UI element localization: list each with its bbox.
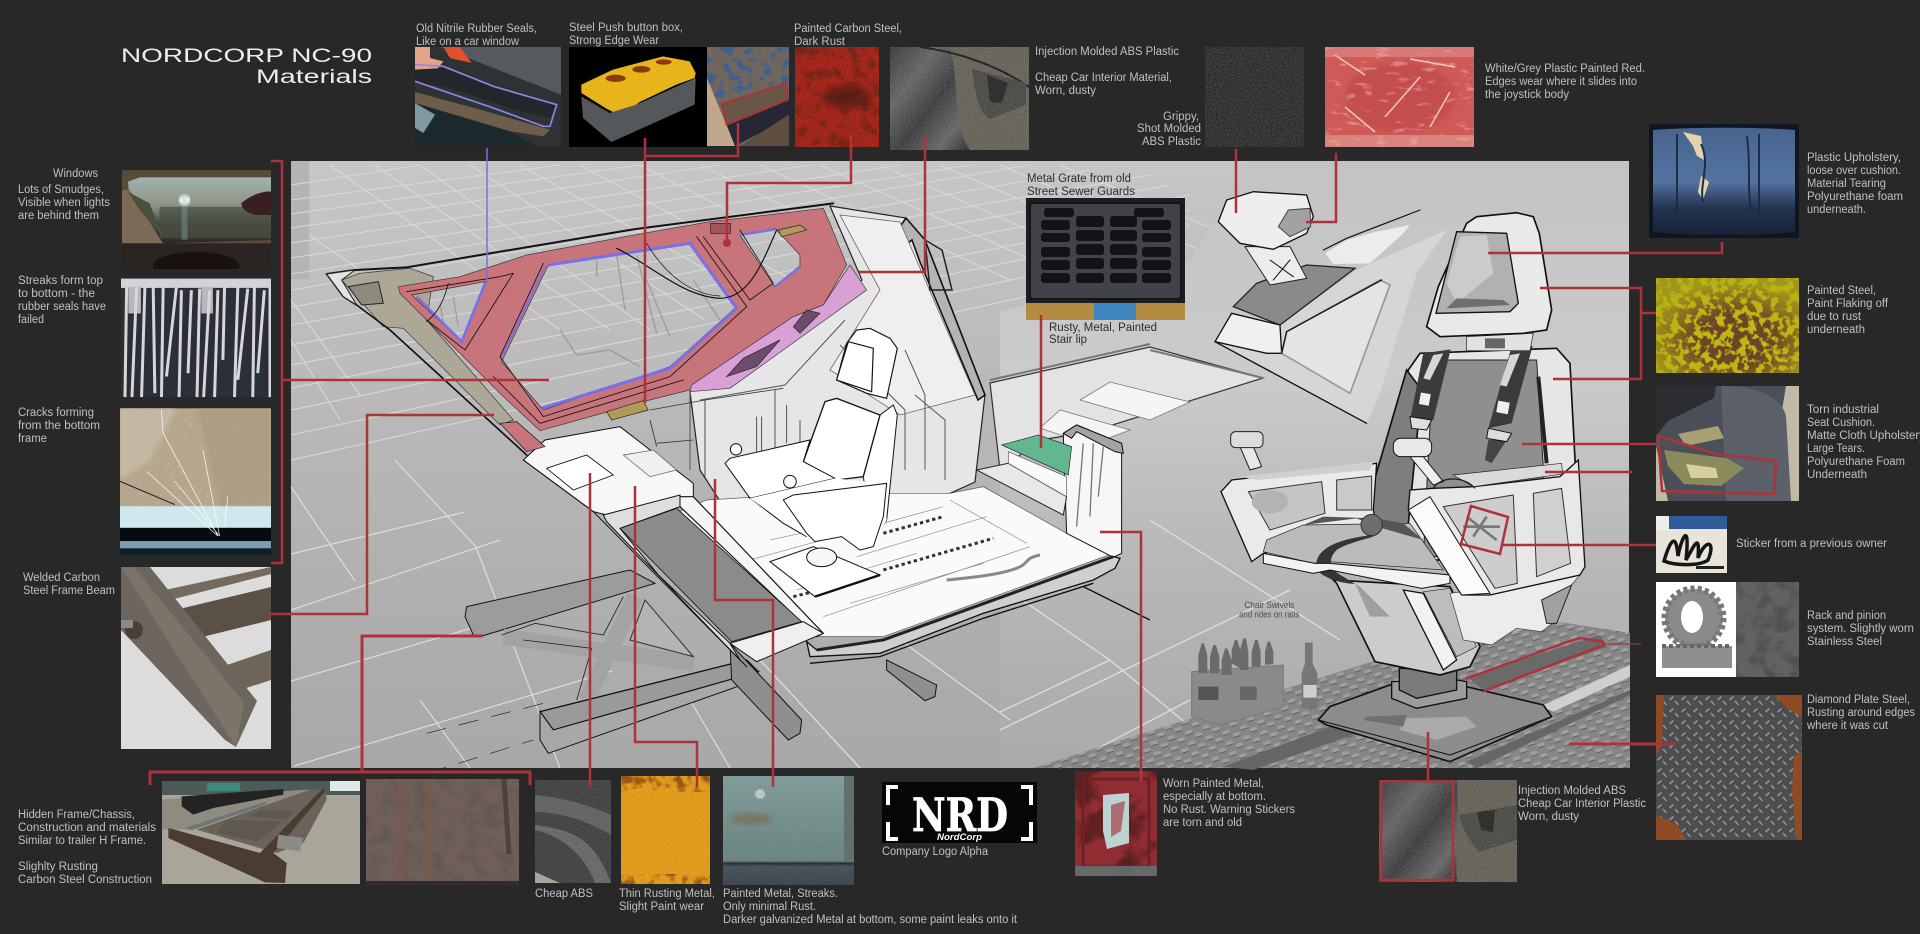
caption: chassis: Hidden Frame/Chassis, <box>18 809 135 821</box>
image: thin rusting metal <box>621 776 710 884</box>
caption: diamond plate: Diamond Plate Steel, <box>1807 694 1910 706</box>
image: red painted plastic <box>1325 47 1474 147</box>
painted steel leader <box>1540 288 1656 379</box>
caption: windows: Windows <box>53 168 98 180</box>
caption: grippy plastic: Grippy, <box>1163 111 1199 123</box>
left handle <box>1240 447 1262 470</box>
caption: metal grate: Stair lip <box>1049 334 1087 346</box>
cheap ABS leader <box>589 473 591 787</box>
base plate <box>770 547 880 597</box>
caption: injection molded detail: Worn, dusty <box>1518 811 1579 823</box>
diamond plate floor <box>1033 622 1630 768</box>
sticker on arm <box>1463 517 1500 540</box>
caption: ABS plastic: Injection Molded ABS Plastic <box>1035 46 1179 58</box>
image: rack and pinion <box>1656 582 1799 677</box>
caption: rack and pinion: system. Slightly worn <box>1807 623 1914 635</box>
caption: upholstery <box>1807 152 1903 216</box>
cab wall details <box>650 388 787 477</box>
caption: worn painted metal: Worn Painted Metal, <box>1163 778 1264 790</box>
caption: injection molded detail: Cheap Car Interior Plastic <box>1518 798 1646 810</box>
bottles <box>1192 638 1317 725</box>
caption: painted metal: Painted Metal, Streaks. <box>723 888 838 900</box>
caption: painted steel: Paint Flaking off <box>1807 298 1889 310</box>
caption: cracks: from the bottom <box>18 420 100 432</box>
caption: cheap ABS: Cheap ABS <box>535 888 593 900</box>
front cross beam <box>540 660 758 730</box>
caption: torn cushion: Torn industrial <box>1807 404 1879 416</box>
floor <box>643 487 1113 637</box>
front windshield frame <box>327 203 867 455</box>
caption: worn painted metal: especially at bottom. <box>1163 791 1266 803</box>
caption: rubber seals: Like on a car window <box>416 36 520 48</box>
torn cushion leaders <box>1522 444 1656 472</box>
image: glass cracks <box>120 408 271 555</box>
caption: frame beam: Welded Carbon <box>23 572 100 584</box>
neck <box>1467 333 1533 351</box>
caption: injection molded detail: Injection Molded ABS <box>1518 785 1626 797</box>
logo <box>882 782 1037 843</box>
ABS leader <box>859 135 925 272</box>
caption: streaks: Streaks form top <box>18 275 103 287</box>
right arm panel <box>1408 460 1585 595</box>
caption: chair swivels: Chair Swivels <box>1244 600 1295 610</box>
button box leader <box>645 123 738 403</box>
sticker leader <box>1461 506 1656 554</box>
caption: upholstery: underneath. <box>1807 204 1866 216</box>
left arm panel <box>1221 463 1377 562</box>
gate <box>1233 265 1355 325</box>
rack leader <box>1465 638 1604 691</box>
caption: torn cushion: Large Tears. <box>1807 443 1865 455</box>
ramp panel <box>677 497 823 637</box>
caption: torn cushion: Polyurethane Foam <box>1807 456 1905 468</box>
caption: push button box <box>569 22 683 47</box>
image: welded frame beam <box>121 567 271 749</box>
tan frame strip <box>342 268 513 425</box>
title <box>121 46 372 88</box>
title: Materials <box>256 66 372 88</box>
caption: thin rusting metal <box>619 888 715 913</box>
caption: upholstery: Polyurethane foam <box>1807 191 1903 203</box>
stair platform <box>990 347 1263 470</box>
seat <box>863 405 897 543</box>
beam leader <box>268 415 494 614</box>
X brace <box>503 597 693 700</box>
caption: thin rusting metal: Slight Paint wear <box>619 901 704 913</box>
caption: painted metal <box>723 888 1018 926</box>
caption: dark rust: Dark Rust <box>794 36 846 48</box>
front seat strip <box>1263 553 1450 588</box>
caption: windows <box>18 168 110 222</box>
chassis bracket <box>150 636 530 785</box>
belts <box>1410 349 1451 420</box>
caption: chair swivels: and rides on rails <box>1239 609 1300 619</box>
seat back frame <box>1367 348 1581 567</box>
rack thin leader <box>1604 643 1641 645</box>
seat cushion <box>1263 523 1443 570</box>
housing <box>1215 230 1447 423</box>
caption: worn painted metal <box>1163 778 1295 829</box>
image: push button box <box>569 47 707 147</box>
joystick sketch <box>1215 192 1447 423</box>
painted metal leader <box>715 479 773 787</box>
caption: rack and pinion: Stainless Steel <box>1807 636 1882 648</box>
logo: NRD <box>912 788 1008 842</box>
caption: logo: Company Logo Alpha <box>882 846 989 858</box>
image: windshield smudges <box>122 170 271 269</box>
black frame lines <box>407 230 773 423</box>
caption: streaks: rubber seals have <box>18 301 106 313</box>
caption: metal grate: Metal Grate from old <box>1027 173 1131 185</box>
caption: painted metal: Darker galvanized Metal at bottom, some paint leaks onto it <box>723 914 1018 926</box>
caption: grippy plastic <box>1137 111 1201 148</box>
image: injection molded detail <box>1379 780 1517 882</box>
caption: push button box: Strong Edge Wear <box>569 35 659 47</box>
image: worn painted metal <box>1075 771 1157 876</box>
base leader <box>1427 732 1429 781</box>
caption: torn cushion: Underneath <box>1807 469 1867 481</box>
caption: upholstery: loose over cushion. <box>1807 165 1901 177</box>
caption: dark rust <box>794 23 902 48</box>
caption: chassis: Slighlty Rusting <box>18 861 98 873</box>
caption: windows: Visible when lights <box>18 197 110 209</box>
caption: chassis <box>18 809 156 886</box>
caption: ABS plastic: Worn, dusty <box>1035 85 1096 97</box>
panel: sketch background <box>291 161 1630 768</box>
stalk <box>1245 247 1307 285</box>
caption: diamond plate: where it was cut <box>1806 720 1889 732</box>
column <box>1333 580 1480 675</box>
caption: chassis: Carbon Steel Construction <box>18 874 152 886</box>
caption: painted steel: underneath <box>1807 324 1865 336</box>
caption: streaks <box>18 275 106 326</box>
caption: dark rust: Painted Carbon Steel, <box>794 23 902 35</box>
pink panel <box>690 265 867 392</box>
red plastic leader <box>1306 153 1336 222</box>
front edge <box>807 557 1120 657</box>
caption: cracks <box>18 407 100 445</box>
chair render <box>1223 575 1630 770</box>
rails <box>1223 727 1357 770</box>
diamond leader <box>1569 742 1675 746</box>
caption: cracks: frame <box>18 433 47 445</box>
long beam <box>730 643 802 740</box>
cables <box>617 230 777 298</box>
image: rubber seals <box>415 47 561 146</box>
caption: sticker: Sticker from a previous owner <box>1736 538 1887 550</box>
caption: chassis: Similar to trailer H Frame. <box>18 835 146 847</box>
wall and floor behind chair <box>1000 161 1629 768</box>
red leader lines <box>150 123 1722 787</box>
image: grippy plastic <box>1205 47 1304 147</box>
cab floor and seat <box>643 328 1150 663</box>
back wall and roof <box>690 206 985 540</box>
caption: ABS plastic: Cheap Car Interior Material, <box>1035 72 1172 84</box>
caption: windows: are behind them <box>18 210 99 222</box>
caption: worn painted metal: are torn and old <box>1163 817 1242 829</box>
yellow latches <box>607 401 648 420</box>
stair lip leader <box>1040 315 1042 448</box>
lower box <box>1450 575 1580 645</box>
windows bracket <box>271 161 549 563</box>
caption: chassis: Construction and materials <box>18 822 156 834</box>
right cushion <box>1453 463 1563 487</box>
image: paint streaks <box>121 278 271 398</box>
front console and ramp <box>523 427 823 667</box>
blue seal outlines <box>542 243 737 408</box>
caption: upholstery: Material Tearing <box>1807 178 1886 190</box>
base <box>1318 685 1552 762</box>
caption: grippy plastic: ABS Plastic <box>1142 136 1201 148</box>
side wall <box>1063 425 1122 557</box>
caption: painted metal: Only minimal Rust. <box>723 901 816 913</box>
caption: grippy plastic: Shot Molded <box>1137 123 1201 135</box>
caption: rubber seals <box>416 23 537 48</box>
blue seal leader <box>486 148 488 283</box>
caption: metal grate <box>1027 173 1157 346</box>
caption: thin rusting metal: Thin Rusting Metal, <box>619 888 715 900</box>
caption: streaks: failed <box>18 314 44 326</box>
caption: red plastic: the joystick body <box>1485 89 1569 101</box>
dark rust leader <box>727 136 851 243</box>
caption: streaks: to bottom - the <box>18 288 95 300</box>
chassis sketch under the vehicle <box>427 570 937 773</box>
image: torn blue upholstery <box>1649 124 1799 238</box>
stairs steps <box>977 463 1067 515</box>
caption: rack and pinion <box>1807 610 1914 648</box>
caption: torn cushion <box>1807 404 1920 481</box>
vehicle interior <box>690 206 1263 540</box>
armrest <box>1325 225 1410 264</box>
caption: painted steel: Painted Steel, <box>1807 285 1876 297</box>
joystick head <box>1218 192 1313 249</box>
image: sewer grate and stair lip <box>1026 198 1185 320</box>
caption: frame beam <box>23 572 115 597</box>
worn metal leader <box>1100 532 1141 781</box>
caption: rack and pinion: Rack and pinion <box>1807 610 1886 622</box>
red frame with window openings <box>398 208 847 431</box>
rear cross beam <box>465 570 655 637</box>
caption: chair swivels <box>1239 600 1300 619</box>
grippy leader <box>1235 149 1237 213</box>
cushion leader <box>1488 242 1722 253</box>
title: NORDCORP NC-90 <box>121 46 372 67</box>
caption: red plastic: White/Grey Plastic Painted Red. <box>1485 63 1645 75</box>
image: cheap ABS <box>535 780 611 883</box>
logo: NordCorp <box>937 832 983 842</box>
image: diamond plate <box>1656 695 1802 840</box>
caption: torn cushion: Seat Cushion. <box>1807 417 1875 429</box>
image: sticker <box>1656 516 1727 573</box>
caption: frame beam: Steel Frame Beam <box>23 585 115 597</box>
caption: diamond plate <box>1806 694 1915 732</box>
image: dark rust <box>795 47 879 147</box>
caption: worn painted metal: No Rust. Warning Stickers <box>1163 804 1295 816</box>
caption: red plastic: Edges wear where it slides into <box>1485 76 1637 88</box>
image: worn blue steel <box>707 47 789 146</box>
caption: painted steel: due to rust <box>1807 311 1862 323</box>
caption: metal grate: Rusty, Metal, Painted <box>1049 322 1157 334</box>
thin rust leader <box>635 486 697 787</box>
caption: push button box: Steel Push button box, <box>569 22 683 34</box>
red dot marker <box>723 239 731 247</box>
image: streaked painted metal <box>723 776 854 885</box>
image: torn seat cushion <box>1656 386 1799 501</box>
caption: metal grate: Street Sewer Guards <box>1027 186 1135 198</box>
image: trailer frame <box>162 781 360 884</box>
image: flaking yellow paint <box>1656 278 1799 373</box>
caption: rubber seals: Old Nitrile Rubber Seals, <box>416 23 537 35</box>
caption: upholstery: Plastic Upholstery, <box>1807 152 1901 164</box>
caption: injection molded detail <box>1518 785 1646 823</box>
caption: diamond plate: Rusting around edges <box>1807 707 1915 719</box>
image: injection molded ABS <box>890 47 1029 150</box>
window streaks <box>440 255 720 367</box>
caption: red plastic <box>1485 63 1645 101</box>
arm handle <box>1410 457 1443 485</box>
caption: ABS plastic <box>1035 46 1179 97</box>
headrest frame <box>1427 213 1552 337</box>
caption: windows: Lots of Smudges, <box>18 184 104 196</box>
caption: painted steel <box>1807 285 1889 336</box>
image: rusted plate <box>366 779 519 881</box>
caption: cracks: Cracks forming <box>18 407 94 419</box>
green stair lip <box>1002 435 1072 475</box>
